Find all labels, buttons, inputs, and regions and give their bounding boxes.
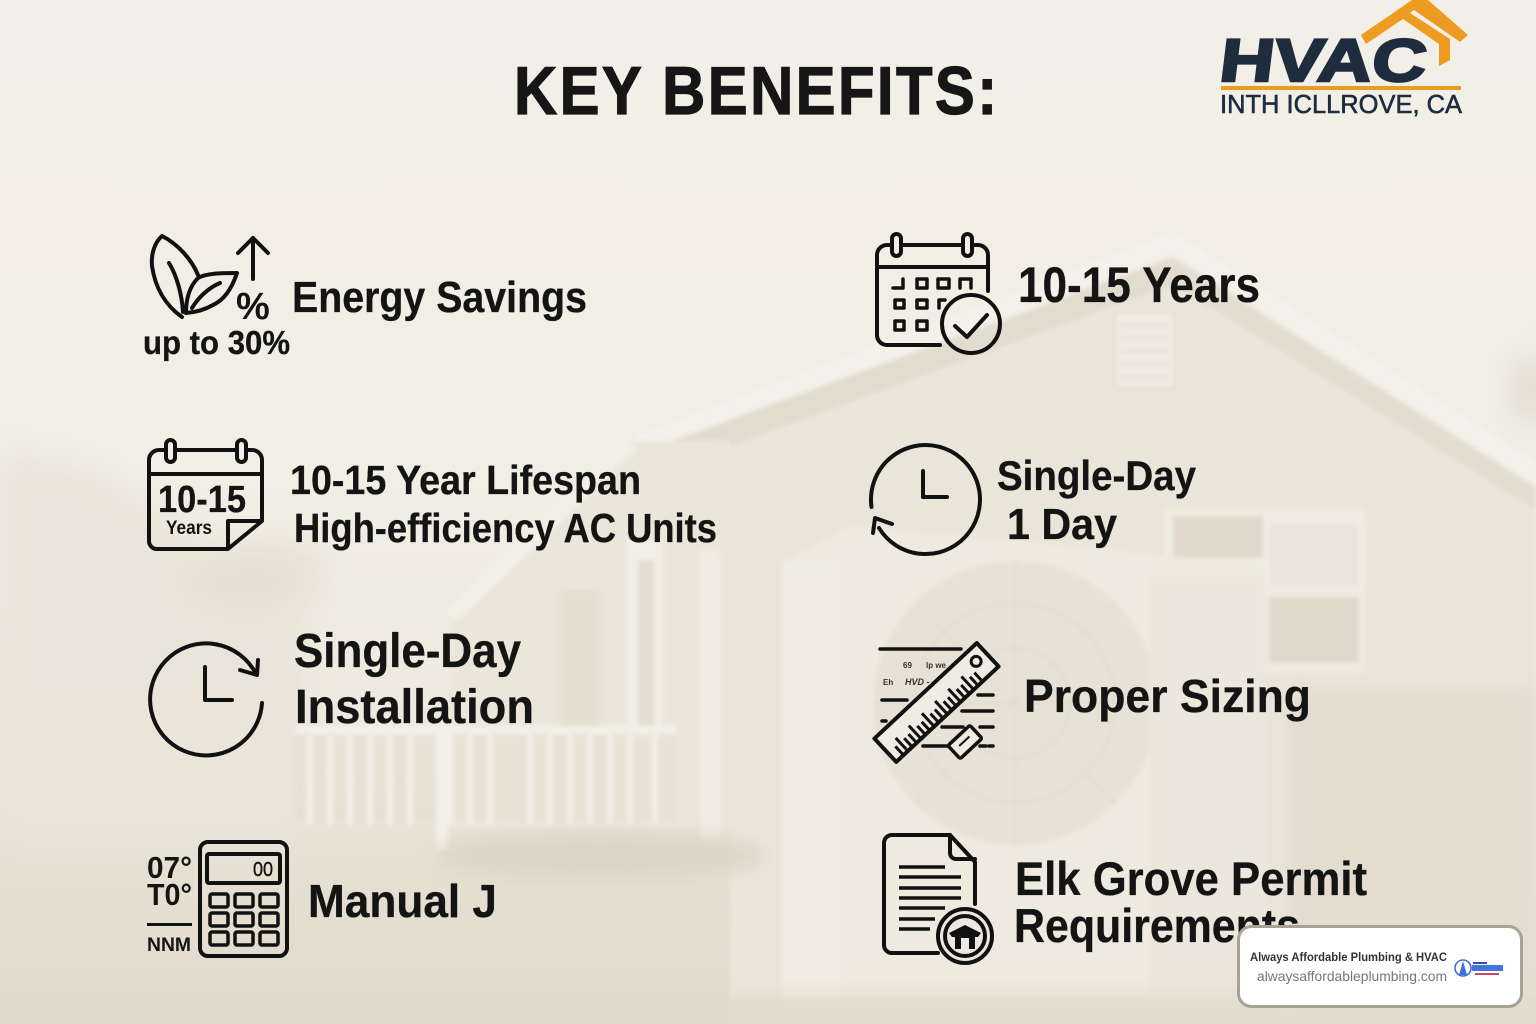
icon: calendar 10-15 years: 10-15 — [158, 479, 246, 521]
title: KEY BENEFITS: — [514, 52, 997, 129]
benefit: single-day installation — [150, 625, 534, 755]
benefit: lifespan: High-efficiency AC Units — [294, 505, 717, 551]
logo: HVAC Elk Grove: INTH ICLLROVE, CA — [1220, 89, 1463, 119]
benefit: single-day 1 day: 1 Day — [1007, 500, 1117, 549]
icon: company logo — [1455, 960, 1503, 976]
benefit: 10-15 years — [877, 234, 1260, 353]
icon: ruler on blueprint — [874, 643, 999, 762]
icon: ruler on blueprint: lp we — [926, 661, 947, 670]
icon: ruler on blueprint: HVD - — [905, 677, 930, 687]
wall — [730, 250, 1536, 1000]
label: Elk Grove Permit — [1015, 852, 1367, 905]
windows — [1165, 508, 1365, 673]
benefit: proper sizing — [874, 643, 1311, 762]
icon: calculator: NNM — [147, 935, 191, 956]
icon: calendar 10-15 years — [149, 440, 262, 549]
icon: calendar 10-15 years: Years — [166, 518, 212, 539]
benefit: permit requirements: Requirements — [1014, 899, 1300, 952]
label: Energy Savings — [292, 273, 587, 322]
icon: calculator — [147, 842, 287, 956]
benefit: single-day installation: Installation — [295, 681, 534, 734]
icon: clock with forward arrow — [150, 643, 262, 755]
icon: permit document with seal — [884, 835, 992, 963]
callout: company badge: alwaysaffordableplumbing.com — [1257, 968, 1447, 984]
icon: calculator: T0° — [147, 877, 192, 912]
icon: leaves with arrow — [152, 236, 268, 317]
label: Single-Day — [294, 625, 521, 678]
benefit: energy savings — [143, 236, 587, 361]
callout: company badge: Always Affordable Plumbing & HVAC — [1250, 950, 1447, 964]
roof fascia — [636, 232, 1536, 486]
icon: calculator: 00 — [253, 859, 273, 881]
AC unit — [782, 526, 1265, 1000]
logo: HVAC Elk Grove — [1216, 0, 1468, 119]
benefit: energy savings: % — [236, 286, 270, 328]
label: 10-15 Years — [1018, 257, 1260, 313]
icon: calculator: 07° — [147, 850, 192, 885]
benefit: permit requirements — [884, 835, 1367, 963]
icon: calendar with check — [877, 234, 1000, 353]
label: 10-15 Year Lifespan — [290, 457, 641, 503]
benefit: manual j — [147, 842, 497, 956]
icon: clock with return arrow — [871, 445, 980, 554]
icon: ruler on blueprint: 69 — [903, 661, 912, 670]
benefit: energy savings: up to 30% — [143, 324, 290, 361]
roof underside — [640, 258, 1173, 452]
icon: ruler on blueprint: Eh — [883, 678, 893, 687]
label: Manual J — [308, 875, 497, 927]
logo: HVAC Elk Grove: HVAC — [1216, 26, 1431, 94]
label: Single-Day — [997, 452, 1197, 499]
callout: company badge — [1238, 926, 1522, 1006]
benefit: single-day 1 day — [871, 445, 1197, 554]
benefit: lifespan — [149, 440, 717, 551]
porch — [450, 440, 730, 830]
gable vent — [1115, 312, 1175, 388]
label: Proper Sizing — [1024, 670, 1311, 722]
